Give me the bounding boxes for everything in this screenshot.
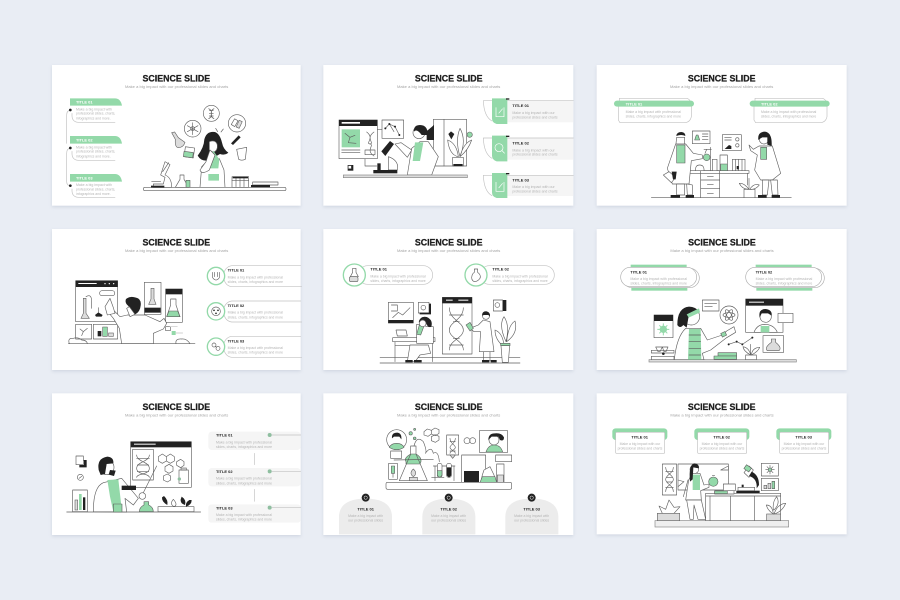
card: title 01: professional slides and charts	[512, 115, 558, 119]
card: title 02	[208, 468, 301, 486]
subtitle: slide 2: Make a big impact with our professional slides and charts	[397, 85, 501, 89]
card: title 01: slides, charts, infographics and more	[626, 114, 681, 118]
card: title 01: Make a big impact with	[76, 107, 112, 111]
card: title 03: professional slides and charts	[782, 447, 827, 451]
card: title 02: slides, charts, infographics and more	[756, 282, 812, 286]
panel: slide 1	[52, 65, 301, 206]
illustration: chemistry bench	[386, 428, 512, 489]
subtitle: slide 1: Make a big impact with our professional slides and charts	[125, 85, 229, 89]
subtitle: slide 3: Make a big impact with our professional slides and charts	[670, 85, 774, 89]
card: title 02	[746, 265, 824, 291]
card: title 01: TITLE 01	[370, 266, 388, 271]
heading: slide 2 title: SCIENCE SLIDE	[415, 73, 482, 83]
connectors	[253, 453, 255, 501]
heading: slide 7 title: SCIENCE SLIDE	[142, 402, 210, 412]
subtitle: slide 6: Make a big impact with our professional slides and charts	[670, 249, 774, 253]
heading: slide 3 title: SCIENCE SLIDE	[688, 73, 755, 83]
panel: slide 8	[323, 393, 573, 535]
card: title 01: Make a big impact with professional	[370, 274, 426, 278]
illustration: two scientists in lab	[651, 131, 791, 198]
panel: slide 6	[597, 229, 847, 370]
card: title 02	[483, 136, 573, 161]
card: title 02: slides, charts, infographics and more	[492, 279, 548, 283]
card: title 01: TITLE 01	[512, 103, 530, 108]
subtitle: slide 7: Make a big impact with our professional slides and charts	[125, 414, 229, 418]
card: title 01: slides, charts, infographics and more	[228, 280, 283, 284]
card: title 02: TITLE 02	[512, 140, 530, 145]
card: title 01: TITLE 01	[216, 433, 233, 438]
illustration: desk scientist and DNA board	[380, 297, 520, 363]
card: title 02: Make a big impact with professional	[492, 274, 548, 278]
card: title 01: Make a big impact with professional	[228, 275, 283, 279]
card: title 01: our professional slides	[348, 519, 383, 523]
panel: slide 5	[323, 229, 573, 370]
card: title 02	[69, 136, 122, 160]
card: title 02: Make a big impact with our	[702, 442, 743, 446]
card: title 01: TITLE 01	[626, 101, 643, 106]
card: title 02	[694, 428, 749, 453]
card: title 01	[614, 98, 694, 123]
card: title 01: TITLE 01	[631, 434, 649, 439]
card: title 02: Make a big impact with	[431, 514, 466, 518]
subtitle: slide 5: Make a big impact with our professional slides and charts	[397, 249, 501, 253]
card: title 02: our professional slides	[431, 519, 466, 523]
heading: slide 1 title: SCIENCE SLIDE	[142, 73, 210, 83]
card: title 03: TITLE 03	[795, 434, 813, 439]
card: title 01: professional slides, charts,	[76, 112, 115, 116]
card: title 02: Make a big impact with professional	[216, 477, 272, 481]
card: title 02: slides, charts, infographics and more	[216, 481, 272, 485]
card: title 01: slides, charts, infographics and more	[216, 445, 272, 449]
card: title 03	[483, 173, 573, 198]
card: title 03: TITLE 03	[228, 338, 245, 343]
card: title 01: Make a big impact with professional	[626, 110, 681, 114]
card: title 02	[422, 494, 475, 534]
card: title 01: slides, charts, infographics and more	[630, 282, 687, 286]
illustration: scientist at lab bench	[655, 463, 789, 527]
card: title 02: TITLE 02	[76, 137, 93, 142]
card: title 01: professional slides and charts	[618, 447, 663, 451]
card: title 02: Make a big impact with professional	[228, 311, 283, 315]
card: title 02: Make a big impact with	[76, 145, 112, 149]
panel: slide 9	[597, 393, 847, 534]
card: title 03: Make a big impact with	[76, 183, 112, 187]
card: title 01	[483, 98, 573, 124]
card: title 01: Make a big impact with our	[620, 442, 661, 446]
card: title 01	[207, 266, 302, 287]
card: title 01	[612, 428, 667, 453]
card: title 01: TITLE 01	[76, 99, 93, 104]
card: title 03: Make a big impact with our	[784, 442, 825, 446]
card: title 03: Make a big impact with	[514, 514, 549, 518]
card: title 03: slides, charts, infographics and more	[216, 518, 272, 522]
card: title 01: Make a big impact with our	[512, 111, 556, 115]
card: title 02	[465, 264, 554, 286]
card: title 02	[750, 98, 830, 123]
card: title 02: TITLE 02	[713, 434, 731, 439]
subtitle: slide 9: Make a big impact with our professional slides and charts	[670, 414, 774, 418]
card: title 02: professional slides and charts	[700, 447, 745, 451]
panel: slide 4	[52, 229, 302, 370]
card: title 01: Make a big impact with professional	[630, 277, 687, 281]
illustration: scientist with video call	[649, 299, 796, 362]
timeline connector	[67, 110, 70, 186]
illustration: scientist with touch screens	[68, 281, 195, 344]
card: title 02: TITLE 02	[756, 269, 773, 274]
heading: slide 6 title: SCIENCE SLIDE	[688, 238, 756, 248]
card: title 03: TITLE 03	[76, 175, 93, 180]
card: title 01: TITLE 01	[357, 506, 375, 511]
card: title 01	[343, 264, 433, 286]
card: title 03	[776, 428, 831, 453]
card: title 01	[621, 265, 699, 291]
card: title 01: TITLE 01	[228, 268, 245, 273]
card: title 03: infographics and more.	[76, 192, 111, 196]
illustration: scientist at microscope	[339, 119, 472, 178]
card: title 02: Make a big impact with our	[512, 148, 556, 152]
card: title 02: TITLE 02	[216, 469, 233, 474]
card: title 02: professional slides, charts,	[76, 150, 115, 154]
card: title 02: Make a big impact with professional	[756, 277, 813, 281]
card: title 02: Make a big impact with professional	[761, 110, 817, 114]
subtitle: slide 8: Make a big impact with our professional slides and charts	[397, 414, 501, 418]
heading: slide 8 title: SCIENCE SLIDE	[415, 402, 482, 412]
card: title 03: TITLE 03	[512, 177, 530, 182]
card: title 02: TITLE 02	[761, 101, 778, 106]
card: title 02: slides, charts, infographics and more	[228, 315, 283, 319]
card: title 01: TITLE 01	[630, 269, 648, 274]
card: title 01: infographics and more.	[76, 116, 111, 120]
card: title 03: Make a big impact with professional	[228, 346, 283, 350]
card: title 01	[208, 432, 301, 450]
card: title 01: Make a big impact with	[348, 514, 383, 518]
illustration: teacher with DNA board	[67, 442, 201, 512]
card: title 03	[505, 494, 558, 534]
card: title 03: TITLE 03	[216, 505, 233, 510]
card: title 03	[208, 504, 301, 523]
card: title 03: professional slides, charts,	[76, 187, 115, 191]
card: title 02: slides, charts, infographics and more	[761, 114, 816, 118]
card: title 01	[339, 494, 392, 534]
card: title 02: TITLE 02	[492, 266, 510, 271]
panel: slide 3	[597, 65, 847, 206]
card: title 03: Make a big impact with professional	[216, 513, 272, 517]
card: title 03	[69, 174, 122, 197]
panel: slide 7	[52, 393, 301, 535]
card: title 03: professional slides and charts	[512, 190, 558, 194]
card: title 02: professional slides and charts	[512, 153, 558, 157]
card: title 03: slides, charts, infographics and more	[228, 351, 283, 355]
heading: slide 4 title: SCIENCE SLIDE	[142, 238, 210, 248]
card: title 01: Make a big impact with professional	[216, 440, 272, 444]
heading: slide 9 title: SCIENCE SLIDE	[688, 402, 755, 412]
panel: slide 2	[323, 65, 573, 206]
card: title 02: infographics and more.	[76, 154, 111, 158]
card: title 01: slides, charts, infographics and more	[370, 279, 426, 283]
card: title 03: TITLE 03	[523, 506, 541, 511]
card: title 03: Make a big impact with our	[512, 185, 556, 189]
subtitle: slide 4: Make a big impact with our professional slides and charts	[125, 249, 229, 253]
card: title 02	[207, 301, 302, 322]
card: title 02: TITLE 02	[440, 506, 458, 511]
card: title 03	[207, 336, 302, 357]
card: title 01	[69, 98, 122, 122]
illustration: scientist thinking	[143, 105, 286, 191]
heading: slide 5 title: SCIENCE SLIDE	[415, 238, 482, 248]
card: title 02: TITLE 02	[228, 303, 245, 308]
card: title 03: our professional slides	[514, 519, 549, 523]
